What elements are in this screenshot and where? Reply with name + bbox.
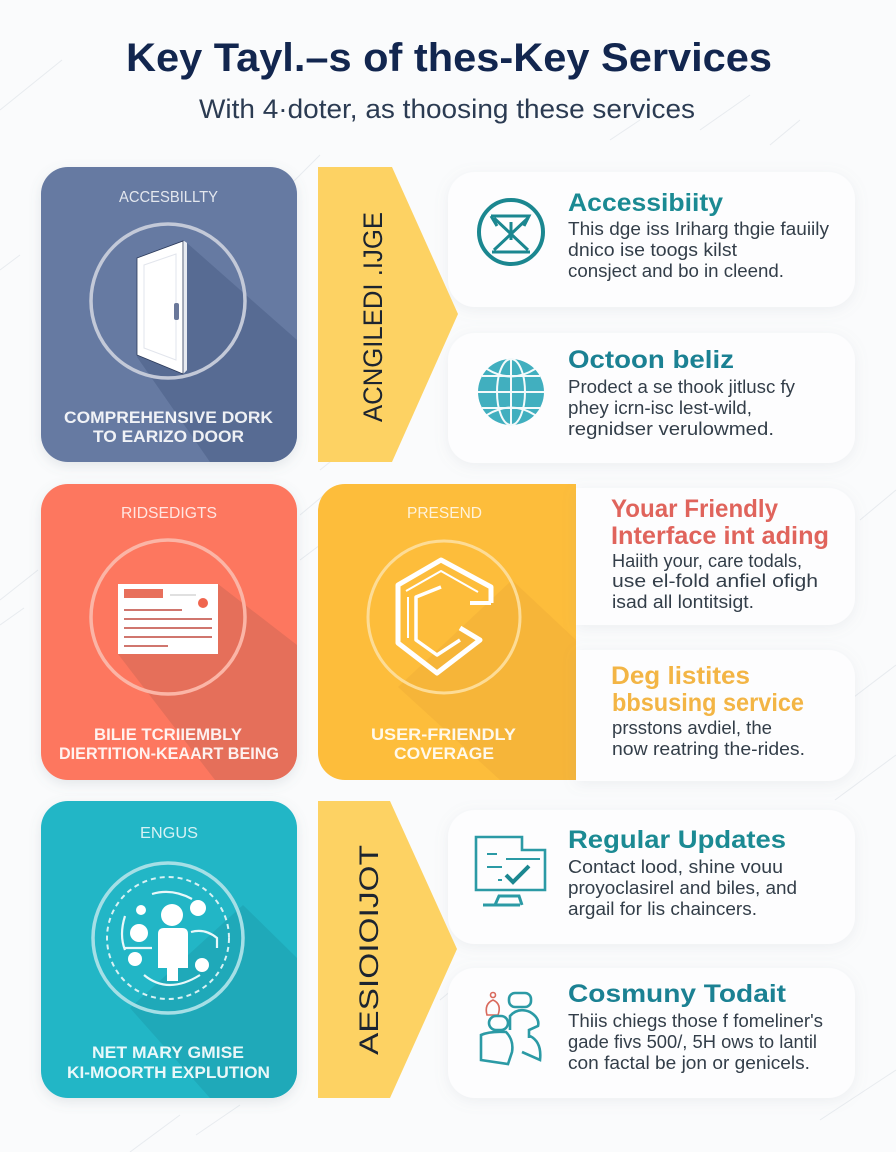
panel caption: TO EARIZO DOOR	[93, 427, 244, 446]
card: octoon beliz	[448, 333, 855, 463]
icon: document	[118, 584, 218, 654]
heading: Interface int ading	[611, 522, 829, 550]
panel label: PRESEND	[407, 505, 482, 522]
body text	[612, 717, 805, 759]
heading	[611, 662, 804, 717]
panel caption	[59, 725, 279, 763]
icon: arrows in circle	[479, 200, 543, 264]
panel caption: COVERAGE	[394, 744, 494, 763]
subtitle: With 4·doter, as thoosing these services	[199, 94, 695, 124]
arrow: row three	[318, 801, 457, 1098]
icon: globe	[478, 359, 544, 425]
icon: monitor with check	[476, 837, 545, 905]
panel caption: DIERTITION-KEAART BEING	[59, 744, 279, 763]
heading: bbsusing service	[612, 689, 804, 717]
panel caption: NET MARY GMISE	[92, 1043, 244, 1062]
heading	[611, 495, 829, 550]
icon long shadow	[130, 905, 297, 1098]
heading: Regular Updates	[568, 826, 786, 854]
body text: This dge iss Iriharg thgie fauiily	[568, 218, 830, 239]
heading: Youar Friendly	[611, 495, 778, 523]
panel caption: COMPREHENSIVE DORK	[64, 408, 274, 427]
body text	[568, 856, 797, 919]
arrow: row one	[318, 167, 458, 462]
panel label: ACCESBILLTY	[119, 189, 218, 206]
panel caption: BILIE TCRIIEMBLY	[94, 725, 243, 744]
body text: phey icrn-isc lest-wild,	[568, 397, 752, 418]
icon long shadow	[398, 580, 576, 780]
body text: prsstons avdiel, the	[612, 717, 772, 738]
rings	[93, 863, 243, 1013]
body text	[612, 550, 818, 612]
body text: argail for lis chaincers.	[568, 898, 757, 919]
panel caption	[64, 408, 274, 446]
icon: people network	[122, 892, 217, 985]
icon: community group	[481, 992, 540, 1064]
panel caption: KI-MOORTH EXPLUTION	[67, 1063, 270, 1082]
ring	[368, 541, 520, 693]
panel: accessibility	[41, 167, 297, 462]
heading: Octoon beliz	[568, 346, 734, 374]
panel caption	[371, 725, 517, 763]
body text: isad all lontitsigt.	[612, 591, 754, 612]
icon: door	[137, 241, 187, 374]
panel caption	[67, 1043, 270, 1082]
body text: now reatring the-rides.	[612, 738, 805, 759]
door long shadow	[137, 243, 297, 462]
panel: yellow	[318, 484, 576, 780]
card: deg listites	[576, 650, 855, 781]
ring	[91, 540, 245, 694]
body text: proyoclasirel and biles, and	[568, 877, 797, 898]
document long shadow	[118, 584, 297, 780]
heading: Accessibiity	[568, 189, 723, 217]
ring	[91, 224, 245, 378]
icon: hexagonal C	[398, 560, 491, 673]
body text: Thiis chiegs those f fomeliner's	[568, 1010, 823, 1031]
body text: consject and bo in cleend.	[568, 260, 784, 281]
panel label: ENGUS	[140, 825, 198, 842]
body text: Haiith your, care todals,	[612, 550, 802, 571]
card: friendly interface	[576, 488, 855, 625]
body text	[568, 1010, 823, 1073]
body text: gade fivs 500/, 5H ows to lantil	[568, 1031, 817, 1052]
arrow label: ACNGILEDI .IJGE	[358, 212, 388, 422]
panel caption: USER-FRIENDLY	[371, 725, 517, 744]
body text: regnidser verulowmed.	[568, 418, 774, 439]
heading: Cosmuny Todait	[568, 980, 787, 1008]
arrow label: AESIOIOIJOT	[354, 845, 384, 1055]
body text: Contact lood, shine vouu	[568, 856, 783, 877]
body text: use el-fold anfiel ofigh	[612, 570, 818, 591]
heading: Deg listites	[611, 662, 750, 690]
body text: dnico ise toogs kilst	[568, 239, 737, 260]
panel: coral	[41, 484, 297, 780]
panel: teal	[41, 801, 297, 1098]
card: accessibility	[448, 172, 855, 307]
title: Key Tayl.–s of thes-Key Services	[126, 36, 772, 80]
panel label: RIDSEDIGTS	[121, 505, 217, 522]
body text: Prodect a se thook jitlusc fy	[568, 376, 796, 397]
body text	[568, 218, 830, 281]
card: community	[448, 968, 855, 1098]
body text	[568, 376, 796, 439]
body text: con factal be jon or genicels.	[568, 1052, 810, 1073]
card: regular updates	[448, 810, 855, 944]
